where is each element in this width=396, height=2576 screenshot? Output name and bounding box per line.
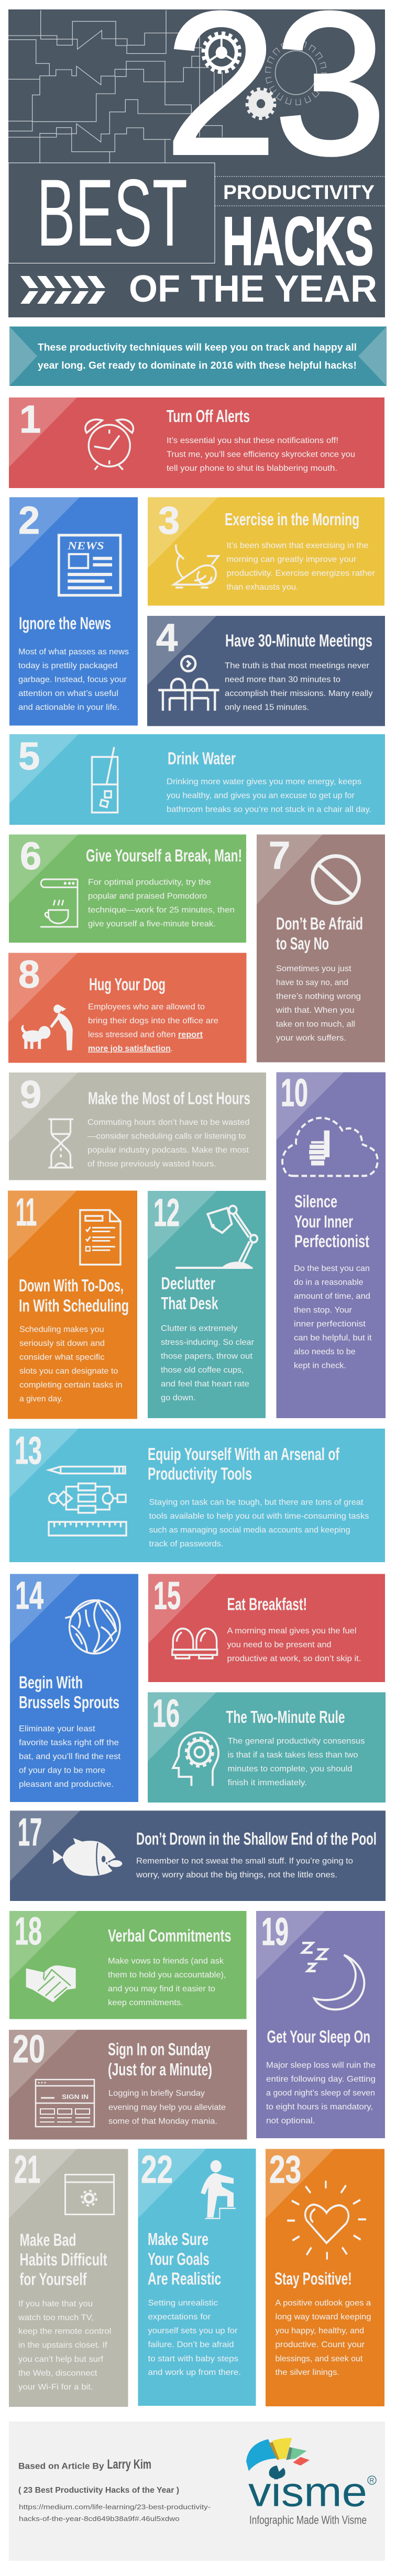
icon: brussels sprout: [65, 1600, 120, 1654]
panel: 15 eat breakfast: 15: [153, 1574, 181, 1617]
panel: 5 drink water: Drinking more water gives you more energy, keeps: [167, 777, 361, 787]
panel: 9 lost hours: popular industry podcasts. Make the most: [87, 1146, 249, 1155]
panel: 13 productivity tools: Staying on task can be tough, but there are tons of great: [149, 1498, 364, 1507]
panel: 9 lost hours: Commuting hours don’t have to be wasted: [87, 1118, 249, 1127]
panel: 8 hug your dog: 8: [18, 953, 40, 996]
panel: 7 say no: to Say No: [276, 934, 329, 953]
icon: newspaper: [59, 535, 120, 595]
panel: 11 scheduling: slots you can designate to: [19, 1367, 118, 1376]
icon: desk lamp: [175, 1206, 257, 1268]
source credit: ( 23 Best Productivity Hacks of the Year ): [18, 2486, 179, 2495]
panel: 20 sign in on sunday: Sign In on Sunday: [108, 2039, 211, 2059]
panel: 23 stay positive: [266, 2148, 384, 2406]
panel: 5 drink water: you healthy, and gives you an excuse to get up for: [167, 791, 355, 800]
panel: 21 bad habits: Habits Difficult: [20, 2250, 107, 2269]
panel: 12 declutter: those papers, throw out: [161, 1352, 253, 1361]
dotted rule and PRODUCTIVITY label: [215, 176, 385, 206]
icon: newspaper: NEWS: [67, 539, 104, 552]
panel: 22 realistic goals: expectations for: [148, 2313, 211, 2321]
panel: 11 scheduling: consider what specific: [19, 1353, 104, 1362]
icon: eggs in tray: [172, 1629, 217, 1659]
icon: alarm clock: [85, 419, 133, 470]
panel: 18 verbal commitments: [9, 1909, 246, 2019]
panel: 22 realistic goals: Setting unrealistic: [148, 2299, 218, 2307]
panel: 20 sign in on sunday: Logging in briefly Sunday: [108, 2089, 205, 2098]
panel: 13 productivity tools: Productivity Tools: [148, 1464, 252, 1483]
icon: head with gear: [173, 1732, 218, 1786]
panel: 5 drink water: Drink Water: [168, 749, 236, 768]
panel: 16 two-minute rule: minutes to complete, you should: [227, 1765, 352, 1773]
BEST box: BEST: [37, 159, 188, 266]
icon: hourglass: [49, 1119, 73, 1168]
panel: 23 stay positive: 23: [269, 2148, 301, 2191]
circuit lines illustration: [8, 10, 222, 163]
panel: 19 sleep: to eight hours is mandatory,: [266, 2103, 373, 2111]
panel: 7 say no: Sometimes you just: [276, 965, 351, 973]
panel: 12 declutter: [148, 1191, 266, 1418]
panel: 10 silence perfectionist: Do the best you can: [294, 1264, 370, 1273]
panel: 2 ignore the news: garbage. Instead, focus your: [18, 676, 127, 684]
panel: 2 ignore the news: attention on what’s useful: [18, 689, 118, 698]
icon: person climbing step: [201, 2160, 236, 2218]
panel: 19 sleep: not optional.: [266, 2117, 315, 2125]
panel: 3 exercise: than exhausts you.: [226, 583, 299, 592]
panel: 22 realistic goals: [138, 2148, 256, 2406]
panel: 4 meetings: accomplish their missions. Many really: [225, 689, 373, 698]
panel: 8 hug your dog: [8, 953, 246, 1063]
panel: 21 bad habits: Make Bad: [20, 2230, 76, 2250]
panel: 18 verbal commitments: Make vows to friends (and ask: [108, 1956, 224, 1966]
icon: person petting dog: [21, 1004, 73, 1051]
panel: 16 two-minute rule: is that if a task takes less than two: [227, 1751, 358, 1760]
panel: 15 eat breakfast: [148, 1574, 385, 1682]
panel: 2 ignore the news: Most of what passes as news: [18, 647, 129, 657]
panel: 20 sign in on sunday: 20: [13, 2027, 45, 2071]
panel: 4 meetings: [147, 616, 385, 726]
panel: 14 brussels sprouts: of your day to be more: [19, 1766, 105, 1775]
visme logo: visme: [248, 2469, 367, 2515]
icon: handshake: [26, 1965, 76, 2002]
panel: 9 lost hours: Make the Most of Lost Hours: [88, 1088, 250, 1108]
panel: 11 scheduling: a given day.: [19, 1395, 63, 1403]
icon: coffee machine: [40, 879, 78, 927]
panel: 1 turn off alerts: [9, 397, 384, 488]
panel: 11 scheduling: completing certain tasks in: [19, 1380, 123, 1390]
chevrons: [20, 276, 105, 304]
panel: 14 brussels sprouts: [10, 1574, 138, 1802]
panel: 6 give yourself a break: For optimal productivity, try the: [88, 878, 211, 887]
panel: 6 give yourself a break: [9, 834, 246, 943]
panel: 8 hug your dog: more job satisfaction.: [88, 1044, 173, 1053]
panel: 2 ignore the news: 2: [18, 499, 40, 542]
panel: 16 two-minute rule: 16: [152, 1691, 180, 1735]
source credit: Based on Article By: [18, 2461, 104, 2471]
panel: 14 brussels sprouts: Eliminate your least: [19, 1724, 95, 1733]
panel: 3 exercise: morning can greatly improve your: [226, 555, 357, 564]
panel: 2 ignore the news: today is prettily packaged: [18, 661, 117, 670]
panel: 10 silence perfectionist: then stop. Your: [294, 1306, 353, 1314]
icon: big fish eating small fish: [52, 1838, 122, 1876]
panel: 10 silence perfectionist: amount of time, and: [294, 1292, 370, 1301]
panel: 6 give yourself a break: popular and praised Pomodoro: [88, 892, 207, 901]
panel: 21 bad habits: you can’t help but surf: [18, 2355, 104, 2364]
panel: 10 silence perfectionist: Silence: [294, 1192, 337, 1211]
panel: 11 scheduling: 11: [16, 1190, 37, 1234]
intro banner: These productivity techniques will keep you on track and happy all: [38, 341, 357, 353]
panel: 12 declutter: and feel that heart rate: [161, 1379, 249, 1389]
icon: meeting table and chairs: [158, 656, 219, 711]
panel: 22 realistic goals: 22: [141, 2148, 173, 2191]
panel: 14 brussels sprouts: Brussels Sprouts: [19, 1693, 119, 1712]
icon: glass with straw: [92, 747, 118, 813]
panel: 3 exercise: [148, 497, 384, 605]
panel: 14 brussels sprouts: pleasant and productive.: [19, 1780, 114, 1789]
panel: 12 declutter: That Desk: [161, 1293, 218, 1313]
panel: 21 bad habits: 21: [14, 2148, 40, 2191]
panel: 13 productivity tools: tools available to help you out with time-consuming tasks: [149, 1512, 369, 1521]
panel: 22 realistic goals: and work up from there.: [148, 2368, 241, 2377]
panel: 22 realistic goals: failure. Don’t be afraid: [148, 2340, 234, 2349]
panel: 13 productivity tools: [9, 1429, 385, 1562]
source credit: hacks-of-the-year-8cd649b38a9f#.46ul5xdwo: [19, 2515, 180, 2523]
panel: 9 lost hours: 9: [20, 1073, 41, 1116]
panel: 8 hug your dog: Employees who are allowed to: [88, 1002, 205, 1012]
panel: 23 stay positive: the silver linings.: [276, 2368, 339, 2377]
panel: 4 meetings: 4: [156, 616, 178, 659]
panel: 10 silence perfectionist: inner perfectionist: [294, 1320, 366, 1329]
intro banner: year long. Get ready to dominate in 2016 with these helpful hacks!: [38, 360, 357, 371]
panel: 20 sign in on sunday: some of that Monday mania.: [108, 2117, 217, 2126]
panel: 18 verbal commitments: and you may find it easier to: [108, 1985, 215, 1993]
panel: 17 shallow end: 17: [18, 1810, 42, 1854]
icon: prohibition sign: [313, 856, 359, 903]
panel: 14 brussels sprouts: Begin With: [19, 1673, 83, 1692]
panel: 11 scheduling: In With Scheduling: [19, 1296, 129, 1315]
panel: 4 meetings: The truth is that most meetings never: [225, 661, 370, 670]
small gear: [247, 89, 274, 118]
panel: 10 silence perfectionist: [277, 1071, 386, 1418]
panel: 3 exercise: It’s been shown that exercising in the: [226, 541, 369, 550]
panel: 5 drink water: [9, 734, 385, 825]
panel: 20 sign in on sunday: (Just for a Minute): [108, 2060, 212, 2079]
header panel: [8, 0, 387, 317]
panel: 7 say no: 7: [269, 834, 290, 877]
panel: 5 drink water: 5: [18, 734, 40, 778]
panel: 21 bad habits: [9, 2148, 128, 2407]
panel: 19 sleep: Major sleep loss will ruin the: [266, 2061, 376, 2070]
panel: 22 realistic goals: to start with baby steps: [148, 2354, 238, 2363]
panel: 7 say no: there’s nothing wrong: [276, 992, 361, 1001]
panel: 4 meetings: only need 15 minutes.: [225, 703, 309, 712]
panel: 9 lost hours: —consider scheduling calls or listening to: [87, 1132, 246, 1141]
panel: 12 declutter: 12: [153, 1191, 180, 1234]
panel: 23 stay positive: A positive outlook goes a: [276, 2299, 371, 2307]
visme logo: Infographic Made With Visme: [249, 2514, 367, 2526]
panel: 12 declutter: stress-inducing. So clear: [161, 1338, 255, 1347]
BEST box: [8, 159, 215, 266]
panel: 5 drink water: bathroom breaks so you’re not stuck in a chair all day.: [167, 805, 371, 814]
footer panel: [9, 2422, 385, 2561]
panel: 21 bad habits: keep the remote control: [18, 2327, 111, 2336]
panel: 10 silence perfectionist: 10: [281, 1071, 308, 1114]
panel: 21 bad habits: in the upstairs closet. If: [18, 2341, 107, 2350]
panel: 22 realistic goals: Your Goals: [148, 2249, 210, 2269]
panel: 23 stay positive: productive. Count your: [276, 2340, 365, 2349]
panel: 16 two-minute rule: The Two-Minute Rule: [226, 1707, 345, 1727]
panel: 8 hug your dog: less stressed and often report: [88, 1031, 203, 1039]
panel: 23 stay positive: you happy, healthy, and: [276, 2326, 364, 2336]
panel: 22 realistic goals: Are Realistic: [148, 2269, 221, 2288]
icon: checklist document: [80, 1210, 120, 1265]
panel: 9 lost hours: [9, 1073, 266, 1180]
panel: 21 bad habits: your Wi-Fi for a bit.: [18, 2383, 93, 2392]
panel: 15 eat breakfast: you need to be present and: [227, 1640, 331, 1650]
panel: 16 two-minute rule: [148, 1691, 386, 1803]
panel: 12 declutter: go down.: [161, 1394, 196, 1402]
panel: 21 bad habits: the Web, disconnect: [18, 2369, 97, 2378]
panel: 4 meetings: need more than 30 minutes to: [225, 676, 340, 684]
panel: 18 verbal commitments: keep commitments.: [108, 1998, 183, 2007]
icon: exercise bike: [174, 545, 218, 588]
panel: 11 scheduling: Scheduling makes you: [19, 1325, 104, 1334]
panel: 13 productivity tools: 13: [15, 1429, 42, 1472]
intro banner: [9, 327, 387, 386]
panel: 21 bad habits: watch too much TV,: [18, 2314, 94, 2322]
icon: dashed cloud with thumb: [282, 1118, 378, 1176]
panel: 3 exercise: 3: [158, 499, 180, 542]
panel: 10 silence perfectionist: do in a reasonable: [294, 1278, 364, 1287]
panel: 1 turn off alerts: It’s essential you shut these notifications off!: [167, 436, 338, 445]
panel: 17 shallow end: Remember to not sweat the small stuff. If you’re going to: [136, 1857, 353, 1865]
panel: 20 sign in on sunday: evening may help you alleviate: [108, 2103, 226, 2112]
panel: 10 silence perfectionist: can be helpful, but it: [294, 1333, 372, 1343]
panel: 18 verbal commitments: 18: [15, 1909, 42, 1953]
panel: 7 say no: have to say no, and: [276, 978, 348, 987]
panel: 16 two-minute rule: The general productivity consensus: [227, 1737, 365, 1746]
panel: 1 turn off alerts: Turn Off Alerts: [167, 406, 250, 426]
OF THE YEAR heading: OF THE YEAR: [129, 268, 377, 310]
panel: 16 two-minute rule: finish it immediately.: [227, 1778, 307, 1787]
outlined gear: [269, 44, 323, 102]
icon: sign-in browser window: SIGN IN: [62, 2093, 89, 2100]
panel: 7 say no: your work suffers.: [276, 1034, 346, 1043]
panel: 22 realistic goals: yourself sets you up for: [148, 2326, 238, 2336]
visme logo: [246, 2438, 376, 2526]
panel: 7 say no: take on too much, all: [276, 1020, 355, 1029]
visme logo: R: [370, 2477, 374, 2484]
panel: 12 declutter: Declutter: [161, 1274, 215, 1293]
panel: 17 shallow end: [10, 1810, 386, 1901]
panel: 1 turn off alerts: tell your phone to shut its blabbering mouth.: [167, 464, 337, 473]
panel: 21 bad habits: If you hate that you: [18, 2299, 93, 2308]
panel: 12 declutter: Clutter is extremely: [161, 1324, 238, 1333]
dotted rule and PRODUCTIVITY label: PRODUCTIVITY: [223, 182, 375, 204]
source credit: Larry Kim: [107, 2457, 151, 2472]
panel: 23 stay positive: blessings, and seek out: [276, 2354, 363, 2363]
panel: 20 sign in on sunday: [9, 2027, 247, 2140]
icon: pencil flowchart ruler: [49, 1467, 126, 1535]
panel: 15 eat breakfast: A morning meal gives you the fuel: [227, 1627, 356, 1635]
panel: 23 stay positive: Stay Positive!: [274, 2269, 352, 2288]
source credit: [18, 2457, 211, 2523]
panel: 8 hug your dog: Hug Your Dog: [89, 975, 166, 994]
panel: 2 ignore the news: [9, 497, 138, 726]
panel: 19 sleep: [256, 1910, 385, 2138]
panel: 19 sleep: entire following day. Getting: [266, 2075, 376, 2084]
icon: sign-in browser window: [36, 2080, 94, 2127]
source credit: https://medium.com/life-learning/23-best-productivity-: [19, 2503, 211, 2511]
panel: 2 ignore the news: Ignore the News: [19, 614, 111, 633]
panel: 1 turn off alerts: 1: [19, 397, 41, 441]
panel: 15 eat breakfast: Eat Breakfast!: [227, 1594, 307, 1614]
panel: 23 stay positive: long way toward keeping: [276, 2313, 371, 2321]
panel: 14 brussels sprouts: 14: [15, 1574, 43, 1617]
panel: 7 say no: with that. When you: [276, 1006, 354, 1015]
panel: 13 productivity tools: track of passwords.: [149, 1540, 223, 1549]
panel: 9 lost hours: of those previously wasted hours.: [87, 1159, 216, 1169]
white gear: [204, 34, 239, 72]
panel: 19 sleep: 19: [261, 1910, 289, 1953]
panel: 19 sleep: a good night’s sleep of seven: [266, 2088, 375, 2098]
panel: 1 turn off alerts: Trust me, you’ll see efficiency skyrocket once you: [167, 450, 355, 459]
panel: 17 shallow end: worry, worry about the big things, not the little ones.: [136, 1871, 337, 1880]
panel: 8 hug your dog: bring their dogs into the office are: [88, 1016, 218, 1025]
panel: 10 silence perfectionist: also needs to be: [294, 1347, 356, 1356]
panel: 22 realistic goals: Make Sure: [148, 2229, 208, 2249]
panel: 7 say no: [257, 834, 385, 1062]
panel: 6 give yourself a break: give yourself a five-minute break.: [88, 920, 216, 928]
panel: 14 brussels sprouts: favorite tasks right off the: [19, 1739, 119, 1747]
panel: 12 declutter: those old coffee cups,: [161, 1366, 244, 1375]
icon: moon and zzz: [302, 1943, 364, 2009]
icon: window with gear: [65, 2174, 114, 2214]
panel: 13 productivity tools: such as managing social media accounts and keeping: [149, 1526, 350, 1534]
panel: 6 give yourself a break: technique—work for 25 minutes, then: [88, 906, 235, 914]
panel: 6 give yourself a break: Give Yourself a Break, Man!: [86, 846, 242, 865]
panel: 15 eat breakfast: productive at work, so don’t skip it.: [227, 1654, 361, 1663]
panel: 18 verbal commitments: them to hold you accountable),: [108, 1971, 226, 1980]
panel: 21 bad habits: for Yourself: [20, 2270, 87, 2288]
panel: 6 give yourself a break: 6: [20, 834, 41, 878]
panel: 10 silence perfectionist: Your Inner: [294, 1212, 353, 1231]
panel: 3 exercise: productivity. Exercise energizes rather: [226, 569, 376, 578]
panel: 14 brussels sprouts: bat, and you’ll find the rest: [19, 1752, 121, 1761]
icon: heart with rays: [287, 2181, 366, 2260]
panel: 11 scheduling: [8, 1190, 137, 1419]
panel: 10 silence perfectionist: kept in check.: [294, 1362, 346, 1370]
panel: 18 verbal commitments: Verbal Commitments: [108, 1926, 232, 1945]
panel: 11 scheduling: Down With To-Dos,: [19, 1276, 124, 1295]
panel: 11 scheduling: seriously sit down and: [19, 1339, 105, 1348]
panel: 2 ignore the news: and actionable in your life.: [18, 703, 119, 712]
panel: 10 silence perfectionist: Perfectionist: [294, 1232, 369, 1251]
